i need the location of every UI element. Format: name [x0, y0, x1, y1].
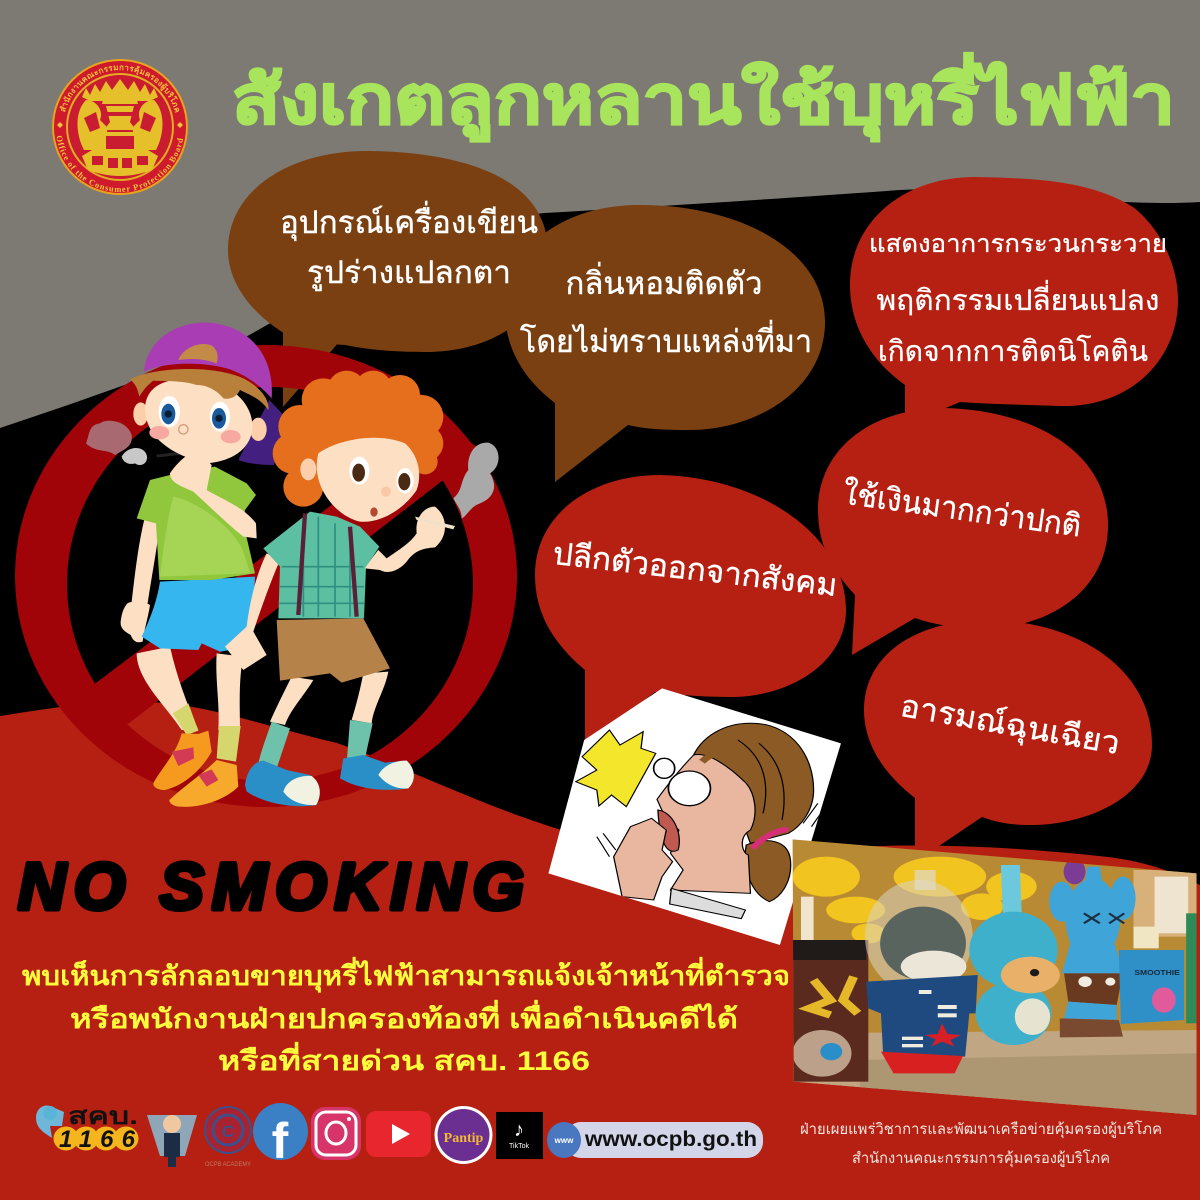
- glasses: [654, 758, 710, 806]
- bubble text: อารมณ์ฉุนเฉียว: [897, 688, 1122, 763]
- boy right: raised arm and hand: [365, 507, 445, 572]
- hair: [692, 723, 814, 843]
- boy right: plaid shirt: [263, 512, 379, 618]
- footer icon: Facebook: f: [272, 1113, 289, 1169]
- motion lines: [597, 803, 822, 857]
- reporting instructions: พบเห็นการลักลอบขายบุหรี่ไฟฟ้าสามารถแจ้งเจ้าหน้าที่ตำรวจ: [22, 956, 790, 993]
- footer icon: officer character: [147, 1115, 197, 1167]
- smoke right: [453, 443, 499, 518]
- hand: [614, 818, 673, 900]
- footer icon: hotline 1166: 1166: [59, 1126, 136, 1153]
- boy right: blue shoes: [245, 755, 414, 806]
- floor: [793, 1030, 1197, 1117]
- boy right: teal socks: [257, 720, 373, 768]
- boy left: blush: [149, 426, 241, 443]
- boy right: suspenders: [298, 513, 357, 617]
- bubble text: ใช้เงินมากกว่าปกติ: [841, 475, 1083, 544]
- footer icon: Pantip: [434, 1106, 492, 1164]
- boy left: legs: [137, 647, 243, 730]
- open mouth: [658, 810, 679, 851]
- ponytail: [745, 841, 791, 902]
- behaviour text: เกิดจากการติดนิโคติน: [878, 334, 1148, 368]
- boy right: back arm: [225, 553, 280, 670]
- boy left: raised arm and hand: [170, 452, 257, 538]
- footer icon: website pill: [547, 1122, 763, 1158]
- footer icon: Instagram: [311, 1107, 361, 1160]
- yellow burst: [576, 730, 656, 807]
- logo: Office of the Consumer Protection Board seal: [52, 59, 188, 195]
- flowers: [793, 857, 1037, 943]
- footer icon: YouTube: [366, 1111, 431, 1157]
- boy left: green shirt: [137, 467, 256, 580]
- speech bubble: spending (red): [818, 408, 1108, 655]
- footer icon: OCPB circle logo: C: [222, 1122, 234, 1141]
- hair tie: [753, 830, 788, 848]
- logo: Office of the Consumer Protection Board seal: Office of the Consumer Protection Board: [56, 136, 183, 192]
- boy left: socks: [173, 703, 241, 762]
- seal lettering: สำนักงานคณะกรรมการคุ้มครองผู้บริโภค: [60, 65, 180, 113]
- footer icon: OCPB circle logo: OCPB ACADEMY: [205, 1162, 251, 1168]
- stationery bubble tail: [283, 330, 345, 407]
- boy left: nose: [179, 425, 188, 434]
- footer icon: hotline 1166: [36, 1103, 138, 1153]
- boy right: face: [317, 438, 419, 522]
- heading: NO SMOKING: NO SMOKING: [18, 849, 524, 923]
- pale right wall: [1133, 870, 1197, 937]
- footer icon: OCPB circle logo: [205, 1107, 251, 1168]
- credit text: สำนักงานคณะกรรมการคุ้มครองผู้บริโภค: [852, 1149, 1110, 1168]
- smoke left: [86, 421, 147, 465]
- kaws style toy: [1049, 867, 1136, 1037]
- bubble text: ปลีกตัวออกจากสังคม: [551, 536, 839, 603]
- behaviour text: พฤติกรรมเปลี่ยนแปลง: [876, 280, 1160, 317]
- behaviour text: แสดงอาการกระวนกระวาย: [869, 230, 1167, 258]
- reporting instructions: หรือที่สายด่วน สคบ. 1166: [218, 1041, 590, 1076]
- illustration: shocked woman: [548, 688, 841, 945]
- bubble text: stationery second line: รูปร่างแปลกตา: [307, 255, 511, 291]
- boy right: eyes: [349, 457, 414, 493]
- footer icon: TikTok: [496, 1112, 543, 1159]
- footer icon: Facebook: [253, 1103, 308, 1169]
- background: red wave: [0, 702, 1200, 1200]
- boy left: orange shoes: [153, 731, 238, 807]
- boy right: legs: [270, 672, 388, 725]
- boy right: hair: [273, 371, 443, 507]
- credit text: [800, 1120, 1162, 1168]
- footer icon: hotline 1166: สคบ.: [68, 1103, 138, 1130]
- footer icon: website pill: www.ocpb.go.th: [584, 1128, 757, 1151]
- hair strands: [738, 740, 784, 820]
- left cup: [793, 897, 868, 1082]
- no smoking prohibition ring: [15, 345, 517, 807]
- bubble text: scent second line: โดยไม่ทราบแหล่งที่มา: [520, 320, 812, 359]
- boy left: purple cap: [144, 323, 272, 398]
- collar: [670, 888, 745, 919]
- boy left: blue shorts: [142, 577, 255, 652]
- footer icon: TikTok: ♪: [514, 1119, 524, 1141]
- behaviour text: [869, 230, 1167, 368]
- boy right: nose and mouth: [370, 487, 391, 517]
- right edge bottle: [1186, 913, 1197, 1023]
- smoothie bottle: [1119, 927, 1184, 1024]
- speech bubble: behaviour (red): [850, 177, 1178, 425]
- bubble text: อุปกรณ์เครื่องเขียน: [280, 201, 538, 242]
- purple vase: [1064, 862, 1086, 884]
- boy left: hand: [121, 602, 150, 642]
- footer icon: TikTok: TikTok: [509, 1143, 529, 1150]
- boy left: eyes: [159, 396, 230, 432]
- cigarette left: [157, 453, 180, 456]
- speech bubble: moody (red): [864, 620, 1152, 852]
- reporting instructions: [22, 956, 790, 1076]
- reporting instructions: หรือพนักงานฝ่ายปกครองท้องที่ เพื่อดำเนินคดีได้: [70, 999, 738, 1034]
- speech bubble: stationery (brown): [228, 151, 548, 352]
- boy right: ear: [300, 458, 316, 480]
- bubble text: กลิ่นหอมติดตัว: [566, 262, 762, 301]
- eyebrow: [699, 755, 713, 764]
- footer icon: Pantip: Pantip: [444, 1131, 484, 1146]
- speech bubble: scent (brown): [505, 205, 825, 482]
- footer icon: website pill: www: [554, 1136, 574, 1145]
- seal emblem: [78, 79, 162, 176]
- face and neck: [657, 755, 755, 893]
- seal diamonds: [57, 122, 183, 128]
- photo: novelty e-cigarette devices: [788, 837, 1200, 1120]
- boy left: face: [145, 379, 252, 463]
- speech bubble: withdrawal (red): [535, 475, 846, 745]
- boy right: tan shorts: [277, 618, 390, 683]
- boy left: back arm: [132, 517, 160, 605]
- cigarette right: [415, 517, 455, 529]
- tiger-in-dino toy: [969, 865, 1060, 1045]
- smoothie bottle: SMOOTHIE: [1134, 969, 1180, 977]
- boy left: ears: [133, 402, 267, 441]
- illustration: two boys smoking: [86, 323, 499, 807]
- boy left: hat brim: [238, 400, 287, 465]
- husky toy: [865, 870, 978, 1073]
- boy left: hair: [130, 369, 269, 410]
- credit text: ฝ่ายเผยแพร่วิชาการและพัฒนาเครือข่ายคุ้มครองผู้บริโภค: [800, 1120, 1162, 1139]
- title: สังเกตลูกหลานใช้บุหรี่ไฟฟ้า: [232, 52, 1175, 142]
